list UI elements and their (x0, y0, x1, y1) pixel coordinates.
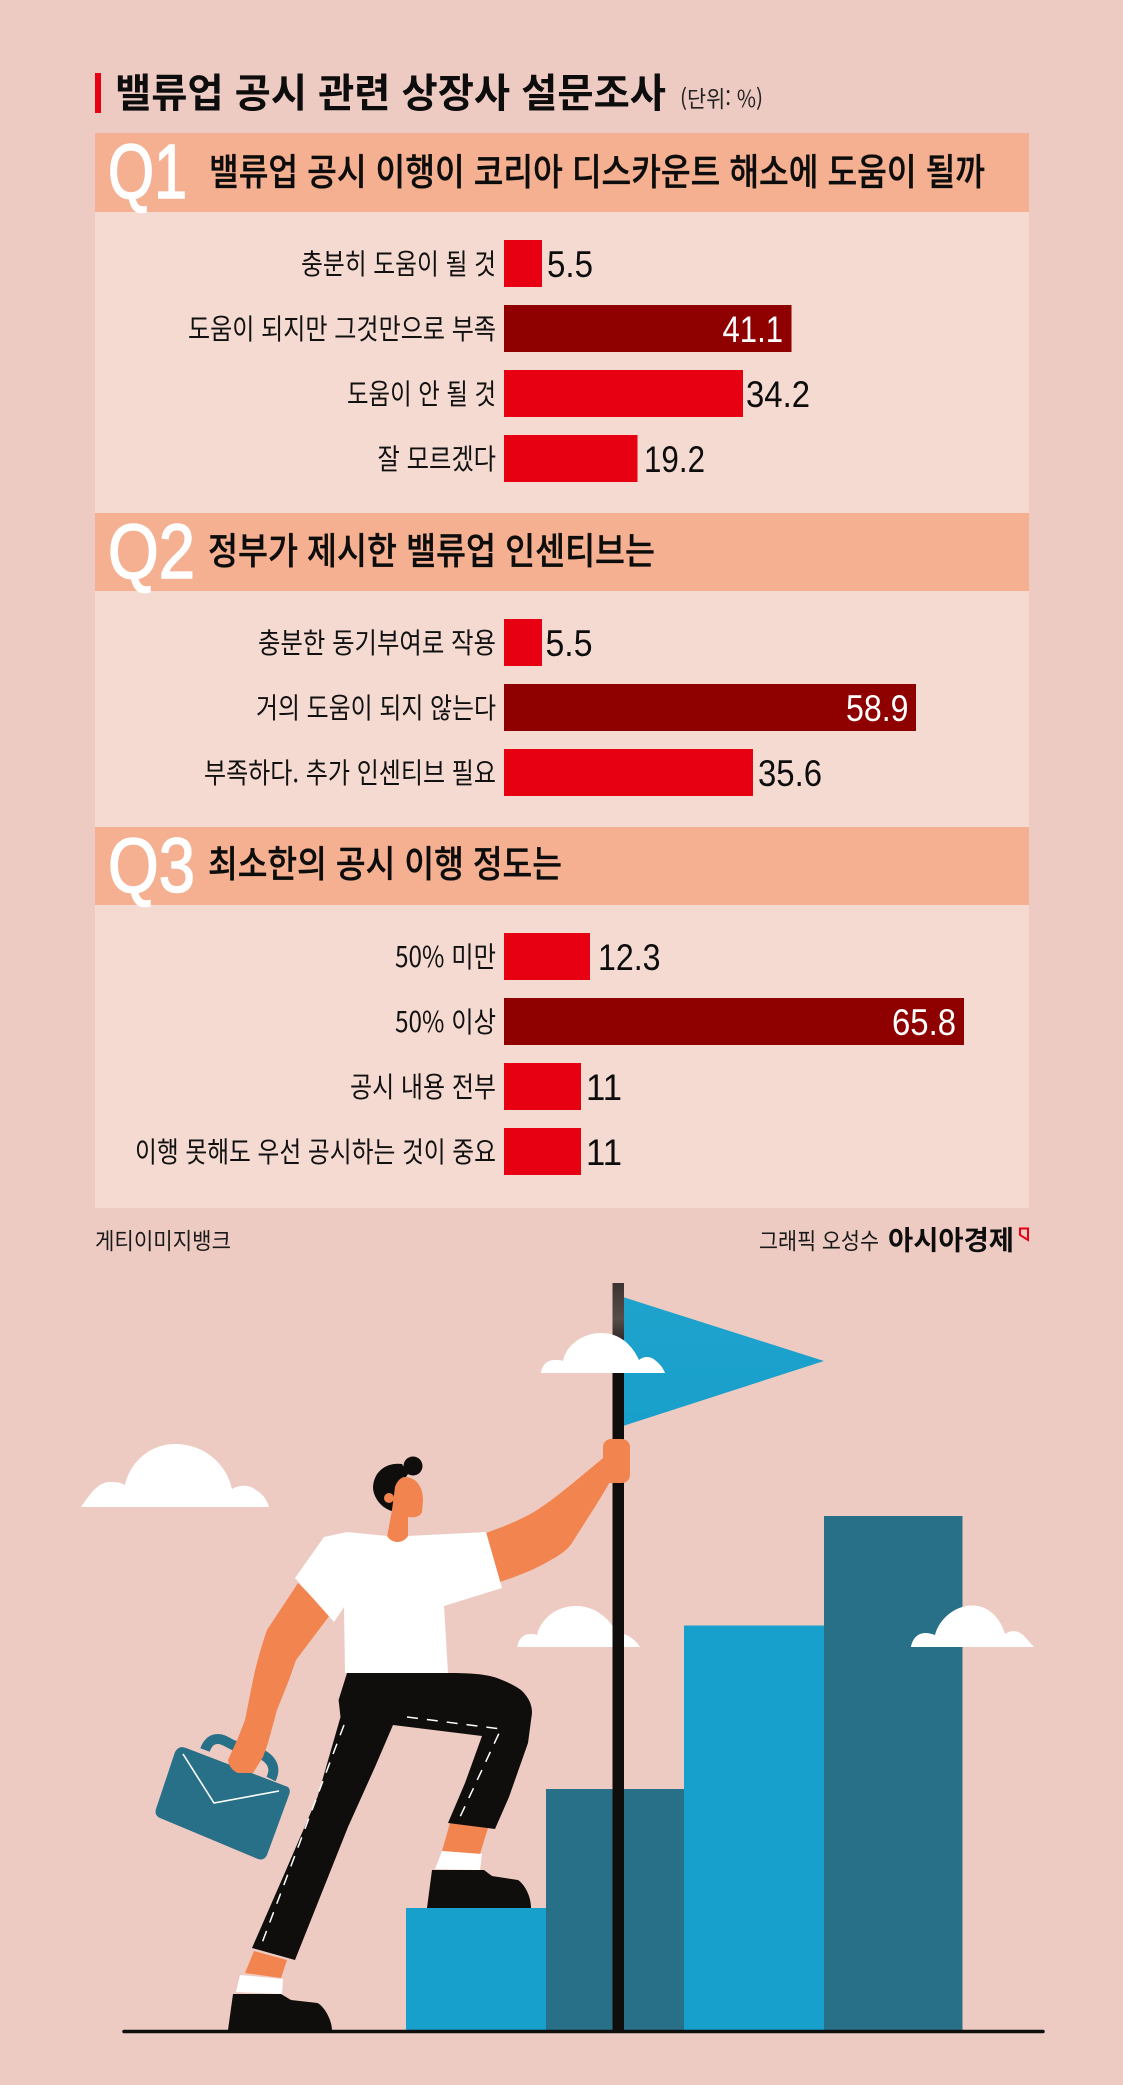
row: 도움이 되지만 그것만으로 부족 41.1: 도움이 되지만 그것만으로 부족 (188, 307, 496, 348)
step bars (406, 1516, 962, 2030)
row: 50% 이상 65.8: 65.8 (892, 1002, 956, 1043)
row: 거의 도움이 되지 않는다 58.9: 거의 도움이 되지 않는다 (256, 686, 496, 727)
row: 공시 내용 전부 11: 11 (586, 1067, 622, 1108)
back ankle (245, 1951, 287, 1978)
flag (623, 1297, 824, 1426)
row: 이행 못해도 우선 공시하는 것이 중요 11: 이행 못해도 우선 공시하는 것이 중요 (135, 1130, 496, 1171)
flag pole (612, 1283, 624, 2030)
panel: Q2 (95, 509, 1029, 827)
panel: Q1 (95, 129, 1029, 513)
ear (384, 1493, 394, 1503)
row: 50% 이상 65.8 (395, 998, 964, 1045)
shirt (295, 1532, 502, 1673)
Q3 header: Q3 (108, 823, 195, 909)
row: 거의 도움이 되지 않는다 58.9: 58.9 (846, 688, 908, 729)
hand on pole (603, 1439, 630, 1483)
Q3 body background (95, 905, 1029, 1208)
hair (373, 1456, 422, 1511)
unit note: (단위: %) (680, 80, 763, 114)
row: 충분히 도움이 될 것 5.5 (301, 240, 593, 287)
row: 충분한 동기부여로 작용 5.5: 충분한 동기부여로 작용 (258, 621, 496, 662)
row: 도움이 안 될 것 34.2: 34.2 (746, 374, 810, 415)
ground line (124, 2030, 1043, 2033)
row: 도움이 되지만 그것만으로 부족 41.1: 41.1 (722, 309, 783, 350)
Q2 header: 정부가 제시한 밸류업 인센티브는 (208, 521, 655, 575)
row: 공시 내용 전부 11 (350, 1063, 622, 1110)
title: 밸류업 공시 관련 상장사 설문조사 (115, 61, 666, 119)
Q1 header (95, 129, 1029, 215)
Q1 header: 밸류업 공시 이행이 코리아 디스카운트 해소에 도움이 될까 (209, 142, 985, 196)
back sock (236, 1975, 283, 1994)
Q1 header: Q1 (108, 129, 187, 215)
row: 잘 모르겠다 19.2 (378, 435, 705, 482)
row: 50% 이상 65.8: 50% 이상 (395, 1000, 496, 1041)
Q2 header: Q2 (108, 509, 195, 595)
front shoe (427, 1870, 531, 1908)
cloud in front of flag (541, 1333, 665, 1373)
back shoe (228, 1994, 332, 2030)
row: 50% 미만 12.3 (395, 933, 660, 980)
raised arm (486, 1458, 611, 1582)
row: 충분한 동기부여로 작용 5.5: 5.5 (546, 623, 592, 664)
row: 부족하다. 추가 인센티브 필요 35.6: 부족하다. 추가 인센티브 필요 (204, 751, 496, 792)
row: 잘 모르겠다 19.2: 19.2 (644, 439, 705, 480)
row: 충분히 도움이 될 것 5.5: 5.5 (547, 244, 593, 285)
Q2 header (95, 509, 1029, 595)
Q3 header: 최소한의 공시 이행 정도는 (208, 834, 562, 888)
Q2 body background (95, 591, 1029, 827)
graphic credit: 그래픽 오성수 (759, 1222, 879, 1256)
front ankle (442, 1823, 488, 1854)
Q3 header (95, 823, 1029, 909)
row: 도움이 안 될 것 34.2: 도움이 안 될 것 (347, 372, 496, 413)
face and neck (387, 1477, 423, 1543)
lower arm and hand (228, 1583, 330, 1773)
row: 도움이 되지만 그것만으로 부족 41.1 (188, 305, 792, 352)
row: 공시 내용 전부 11: 공시 내용 전부 (350, 1065, 496, 1106)
cloud right (911, 1606, 1034, 1647)
panel: Q3 (95, 823, 1029, 1208)
person (156, 1439, 630, 2030)
row: 50% 미만 12.3: 12.3 (598, 937, 660, 978)
Q1 body background (95, 212, 1029, 513)
row: 이행 못해도 우선 공시하는 것이 중요 11: 11 (586, 1132, 622, 1173)
briefcase (156, 1739, 290, 1860)
photo credit: 게티이미지뱅크 (95, 1222, 231, 1256)
illustration: person raising flag on rising bars (81, 1283, 1043, 2032)
trouser stitching (262, 1717, 501, 1943)
row: 도움이 안 될 것 34.2 (347, 370, 810, 417)
row: 거의 도움이 되지 않는다 58.9 (256, 684, 916, 731)
cloud behind pole (518, 1606, 640, 1647)
brand logo: 아시아경제 (888, 1219, 1014, 1258)
front sock (435, 1851, 482, 1870)
row: 부족하다. 추가 인센티브 필요 35.6 (204, 749, 822, 796)
row: 충분히 도움이 될 것 5.5: 충분히 도움이 될 것 (301, 242, 496, 283)
row: 부족하다. 추가 인센티브 필요 35.6: 35.6 (758, 753, 822, 794)
row: 잘 모르겠다 19.2: 잘 모르겠다 (378, 437, 496, 478)
row: 50% 미만 12.3: 50% 미만 (395, 935, 496, 976)
cloud left (81, 1444, 269, 1507)
trousers (252, 1673, 532, 1960)
